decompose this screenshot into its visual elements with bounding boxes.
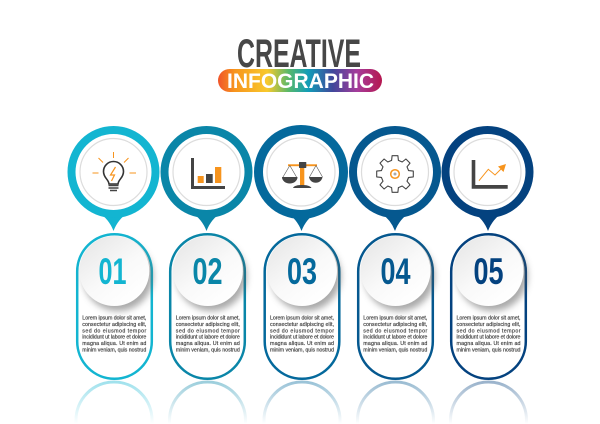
step 5 <box>442 126 534 424</box>
text block 5: sed do eiusmod tempor <box>456 328 521 334</box>
pin 1 <box>98 212 129 231</box>
text block 2 <box>176 316 240 354</box>
text block 1: consectetur adipiscing elit, <box>82 322 146 328</box>
text block 1: minim veniam, quis nostrud <box>82 348 146 354</box>
pin ring 1 <box>68 126 160 218</box>
icon: scales <box>282 162 322 188</box>
step 2 <box>160 126 252 424</box>
heading: infographic: INFOGRAPHIC <box>227 69 374 93</box>
disc shadow 3 <box>271 241 341 311</box>
text block 2: consectetur adipiscing elit, <box>176 322 240 328</box>
text block 1: incididunt ut labore et dolore <box>82 335 146 341</box>
text block 1: magna aliqua. Ut enim ad <box>82 341 146 347</box>
icon: bar chart <box>191 158 225 189</box>
title <box>218 32 382 93</box>
icon: gear <box>377 156 413 192</box>
reflection 2 <box>170 382 246 424</box>
text block 5: consectetur adipiscing elit, <box>456 322 520 328</box>
text block 3: magna aliqua. Ut enim ad <box>270 341 334 347</box>
text block 5: magna aliqua. Ut enim ad <box>456 341 521 347</box>
pin inner ring 2 <box>173 138 240 206</box>
capsule 2 <box>170 234 245 379</box>
reflection 3 <box>264 382 340 424</box>
step 1 <box>68 126 160 424</box>
text block 5: incididunt ut labore et dolore <box>456 335 521 341</box>
disc 4 <box>360 236 430 306</box>
disc shadow 2 <box>176 241 246 311</box>
text block 2: minim veniam, quis nostrud <box>176 348 240 354</box>
pin 2 <box>191 212 222 231</box>
text block 4: Lorem ipsum dolor sit amet, <box>363 316 427 322</box>
pin inner ring 4 <box>362 138 428 206</box>
disc 2 <box>173 236 243 306</box>
number 04: 04 <box>380 251 411 292</box>
reflection 5 <box>450 382 526 424</box>
pin ring 4 <box>349 126 441 218</box>
pin ring 5 <box>442 126 534 218</box>
pin 5 <box>472 212 504 231</box>
pin inner ring 5 <box>454 138 521 206</box>
capsule 3 <box>265 234 339 379</box>
text block 4: minim veniam, quis nostrud <box>363 348 427 354</box>
text block 5: Lorem ipsum dolor sit amet, <box>456 316 520 322</box>
capsule 5 <box>451 234 526 379</box>
disc 5 <box>454 236 524 306</box>
rainbow banner <box>218 69 382 92</box>
pin inner ring 1 <box>80 138 147 206</box>
text block 1 <box>82 316 147 354</box>
capsule 1 <box>77 234 152 379</box>
disc 1 <box>79 236 149 306</box>
text block 1: sed do eiusmod tempor <box>82 328 147 334</box>
pin 4 <box>380 212 410 231</box>
disc shadow 1 <box>83 241 153 311</box>
icon: light bulb <box>92 152 136 190</box>
number 05: 05 <box>474 251 504 292</box>
number 03: 03 <box>287 251 317 292</box>
number 01: 01 <box>98 251 126 292</box>
text block 3 <box>270 316 334 354</box>
text block 4: consectetur adipiscing elit, <box>363 322 427 328</box>
pin face 4 <box>357 134 433 210</box>
text block 3: minim veniam, quis nostrud <box>270 348 334 354</box>
capsule 4 <box>358 234 433 379</box>
text block 2: Lorem ipsum dolor sit amet, <box>176 316 240 322</box>
text block 2: magna aliqua. Ut enim ad <box>176 341 240 347</box>
text block 2: sed do eiusmod tempor <box>176 328 240 334</box>
heading: creative: CREATIVE <box>237 32 361 76</box>
pin ring 2 <box>160 126 252 218</box>
text block 4: incididunt ut labore et dolore <box>363 335 427 341</box>
pin inner ring 3 <box>267 138 335 206</box>
pin face 1 <box>76 134 152 210</box>
pin ring 3 <box>254 125 348 219</box>
reflection 4 <box>358 382 434 424</box>
pin face 3 <box>263 134 339 210</box>
disc 3 <box>267 236 337 306</box>
step 3 <box>254 125 348 424</box>
icon: growth chart <box>472 160 508 189</box>
reflection 1 <box>76 382 152 424</box>
text block 3: consectetur adipiscing elit, <box>270 322 334 328</box>
pin face 5 <box>450 134 526 210</box>
disc shadow 4 <box>364 241 434 311</box>
text block 3: incididunt ut labore et dolore <box>270 335 334 341</box>
text block 5 <box>456 316 521 354</box>
text block 4 <box>363 316 428 354</box>
text block 4: magna aliqua. Ut enim ad <box>363 341 427 347</box>
text block 2: incididunt ut labore et dolore <box>176 335 240 341</box>
text block 1: Lorem ipsum dolor sit amet, <box>82 316 146 322</box>
text block 3: sed do eiusmod tempor <box>270 328 334 334</box>
text block 5: minim veniam, quis nostrud <box>456 348 521 354</box>
pin face 2 <box>168 134 244 210</box>
step 4 <box>349 126 441 424</box>
text block 4: sed do eiusmod tempor <box>363 328 428 334</box>
text block 3: Lorem ipsum dolor sit amet, <box>270 316 334 322</box>
disc shadow 5 <box>458 241 528 311</box>
number 02: 02 <box>192 251 222 292</box>
pin 3 <box>286 212 317 231</box>
